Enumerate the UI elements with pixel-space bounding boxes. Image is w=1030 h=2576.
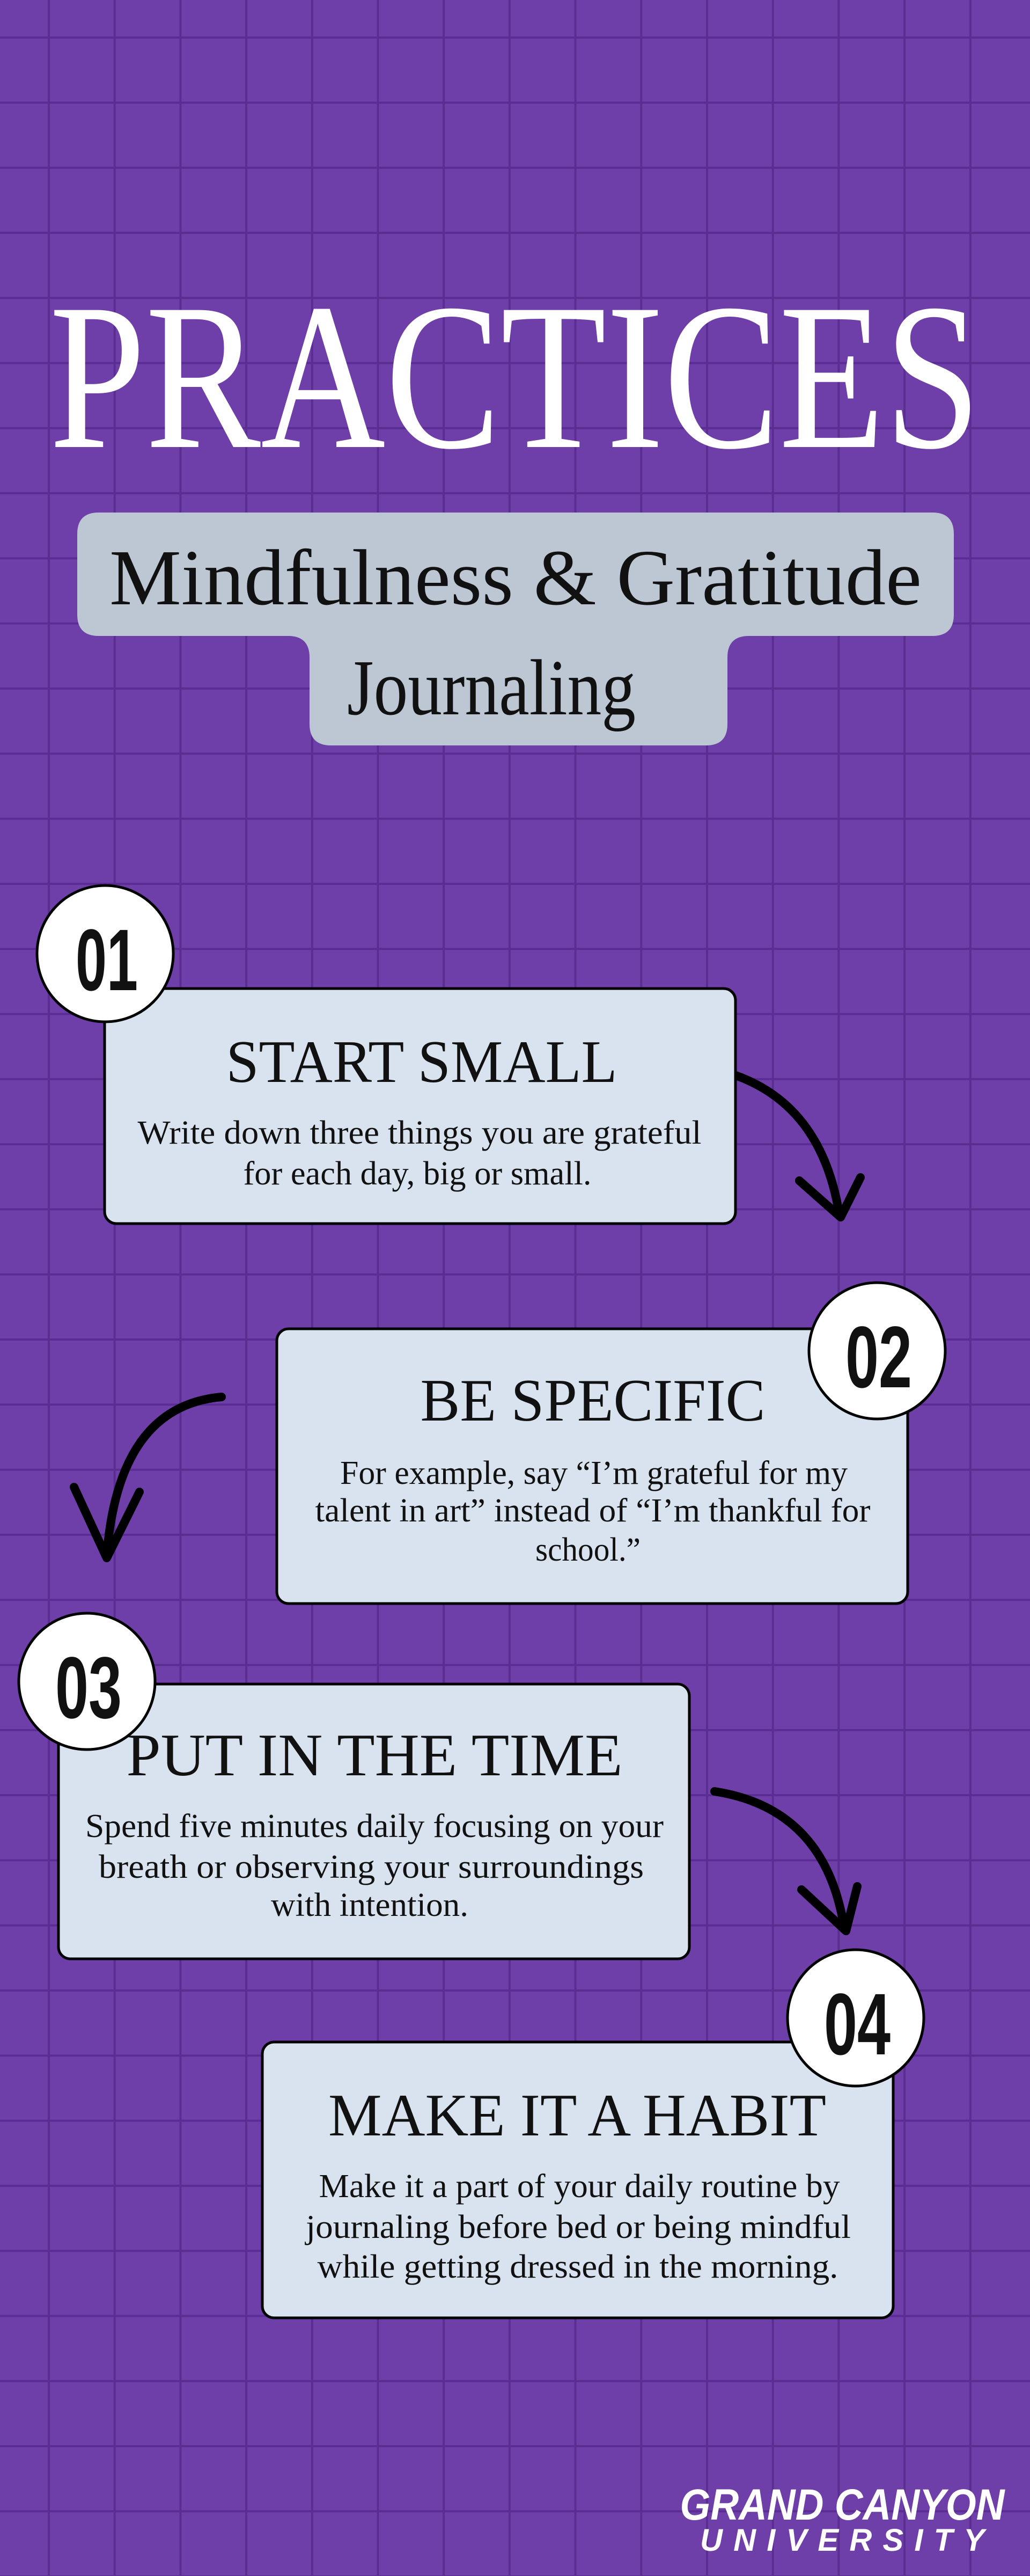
- step 4 body: while getting dressed in the morning.: [318, 2249, 838, 2285]
- badge 04: 04: [824, 1975, 891, 2073]
- subtitle text: [109, 534, 922, 732]
- badge 01: 01: [76, 911, 138, 1009]
- step 1 body: Write down three things you are grateful: [137, 1115, 702, 1151]
- step 3 body: Spend five minutes daily focusing on your: [85, 1808, 664, 1845]
- arrow 2: [74, 1397, 222, 1558]
- step 1 body: [137, 1115, 702, 1192]
- panel: step 2: [277, 1283, 945, 1604]
- step 2 body: school.”: [535, 1532, 641, 1568]
- step 1 title: START SMALL: [226, 1029, 617, 1095]
- step 3 title: PUT IN THE TIME: [127, 1722, 622, 1789]
- step 3 body: [85, 1808, 664, 1923]
- logo: Grand Canyon University: UNIVERSITY: [700, 2523, 987, 2558]
- step 1 body: for each day, big or small.: [244, 1155, 591, 1192]
- step 2 body: talent in art” instead of “I’m thankful for: [315, 1492, 871, 1529]
- badge 03: [19, 1613, 155, 1750]
- step 4 body: Make it a part of your daily routine by: [319, 2168, 840, 2205]
- arrow 1: [716, 1070, 860, 1217]
- arrow 3: [715, 1791, 857, 1931]
- logo: Grand Canyon University: [680, 2480, 1005, 2558]
- subtitle box: [77, 513, 954, 745]
- panel: step 4: [262, 1950, 924, 2318]
- badge 02: [809, 1283, 945, 1419]
- subtitle text: Mindfulness & Gratitude: [109, 534, 922, 622]
- panel: step 3: [19, 1613, 689, 1959]
- panel: step 1: [37, 885, 735, 1224]
- badge 03: 03: [55, 1638, 122, 1737]
- subtitle text: Journaling: [347, 644, 636, 732]
- step 2 body: [315, 1455, 871, 1568]
- step 4 body: journaling before bed or being mindful: [305, 2209, 851, 2245]
- step 3 body: breath or observing your surroundings: [99, 1849, 644, 1885]
- badge 01: [37, 885, 173, 1022]
- badge 04: [788, 1950, 924, 2086]
- step 2 body: For example, say “I’m grateful for my: [340, 1455, 848, 1491]
- step 2 title: BE SPECIFIC: [421, 1367, 765, 1434]
- step 4 title: MAKE IT A HABIT: [328, 2082, 826, 2149]
- step 3 body: with intention.: [271, 1887, 468, 1923]
- step 4 body: [305, 2168, 851, 2285]
- badge 02: 02: [845, 1308, 912, 1406]
